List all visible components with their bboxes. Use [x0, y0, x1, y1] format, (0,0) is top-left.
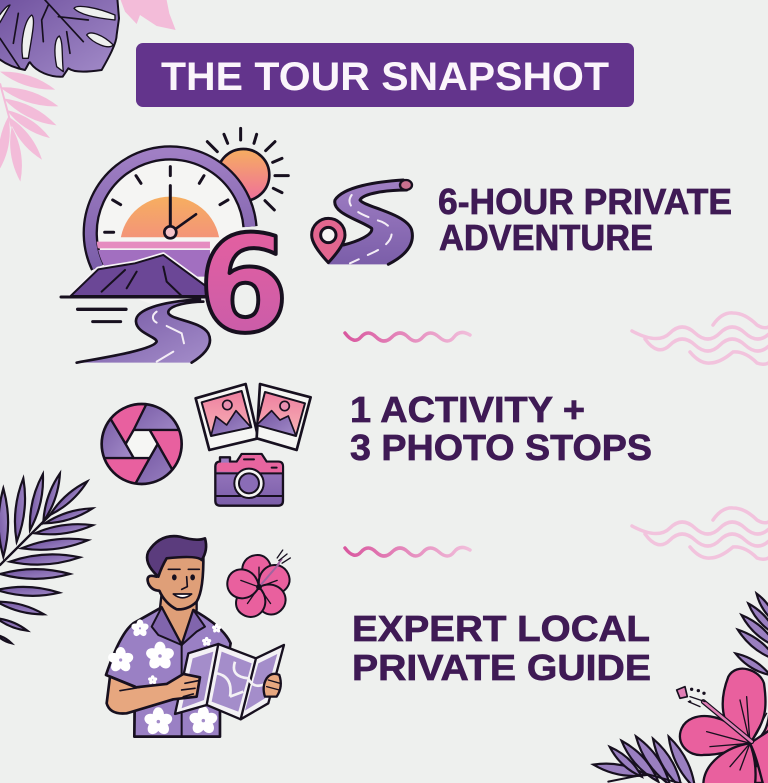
road [77, 299, 210, 363]
text: 1 activity + 3 photo stops: 1 ACTIVITY + [350, 389, 585, 430]
head [147, 536, 206, 609]
text: 6-hour private adventure: 6-HOUR PRIVATE [438, 181, 732, 222]
illustration: tour guide with map [106, 536, 284, 737]
map [175, 644, 284, 719]
decoration: pink leaf top [121, 0, 176, 30]
shirt [106, 607, 231, 737]
text: expert local private guide [352, 608, 651, 688]
clock ring [90, 153, 250, 306]
left polaroid [196, 384, 258, 450]
icon: hibiscus flower large [677, 669, 768, 783]
text: 6-hour private adventure: ADVENTURE [439, 217, 653, 258]
decoration: palm fronds bottom right [592, 592, 768, 783]
wave decoration right upper [632, 313, 768, 364]
decoration: pink palm top left [0, 67, 60, 182]
text: expert local private guide: PRIVATE GUIDE [352, 647, 651, 688]
icon: polaroid photos [196, 384, 311, 506]
right polaroid [257, 384, 311, 450]
title banner: THE TOUR SNAPSHOT [161, 55, 609, 99]
icon: clock with sunrise, mountain and road [61, 128, 288, 363]
title banner [136, 43, 634, 107]
clock ticks [105, 167, 228, 232]
mountain [71, 255, 207, 296]
neck [160, 593, 197, 645]
icon: winding road with map pin [312, 180, 412, 264]
icon: hibiscus flower small [225, 550, 294, 622]
wave divider 1 [345, 332, 470, 341]
wave decoration right lower [632, 508, 768, 559]
ground and speed lines [61, 297, 205, 322]
arms and hands [107, 674, 281, 714]
decoration: monstera leaf top left [0, 0, 119, 77]
sunrise and sea [96, 196, 220, 277]
decoration: purple palm left [0, 472, 94, 644]
text: 6-hour private adventure [438, 181, 732, 258]
icon: camera aperture [100, 402, 183, 486]
camera [215, 454, 283, 506]
wave divider 2 [345, 547, 470, 556]
text: expert local private guide: EXPERT LOCAL [352, 608, 650, 649]
sun with rays [207, 128, 288, 210]
clock hands [164, 186, 196, 238]
text: 1 activity + 3 photo stops: 3 PHOTO STOPS [350, 427, 652, 468]
big number six: 6 [198, 207, 289, 363]
text: 1 activity + 3 photo stops [350, 389, 652, 468]
